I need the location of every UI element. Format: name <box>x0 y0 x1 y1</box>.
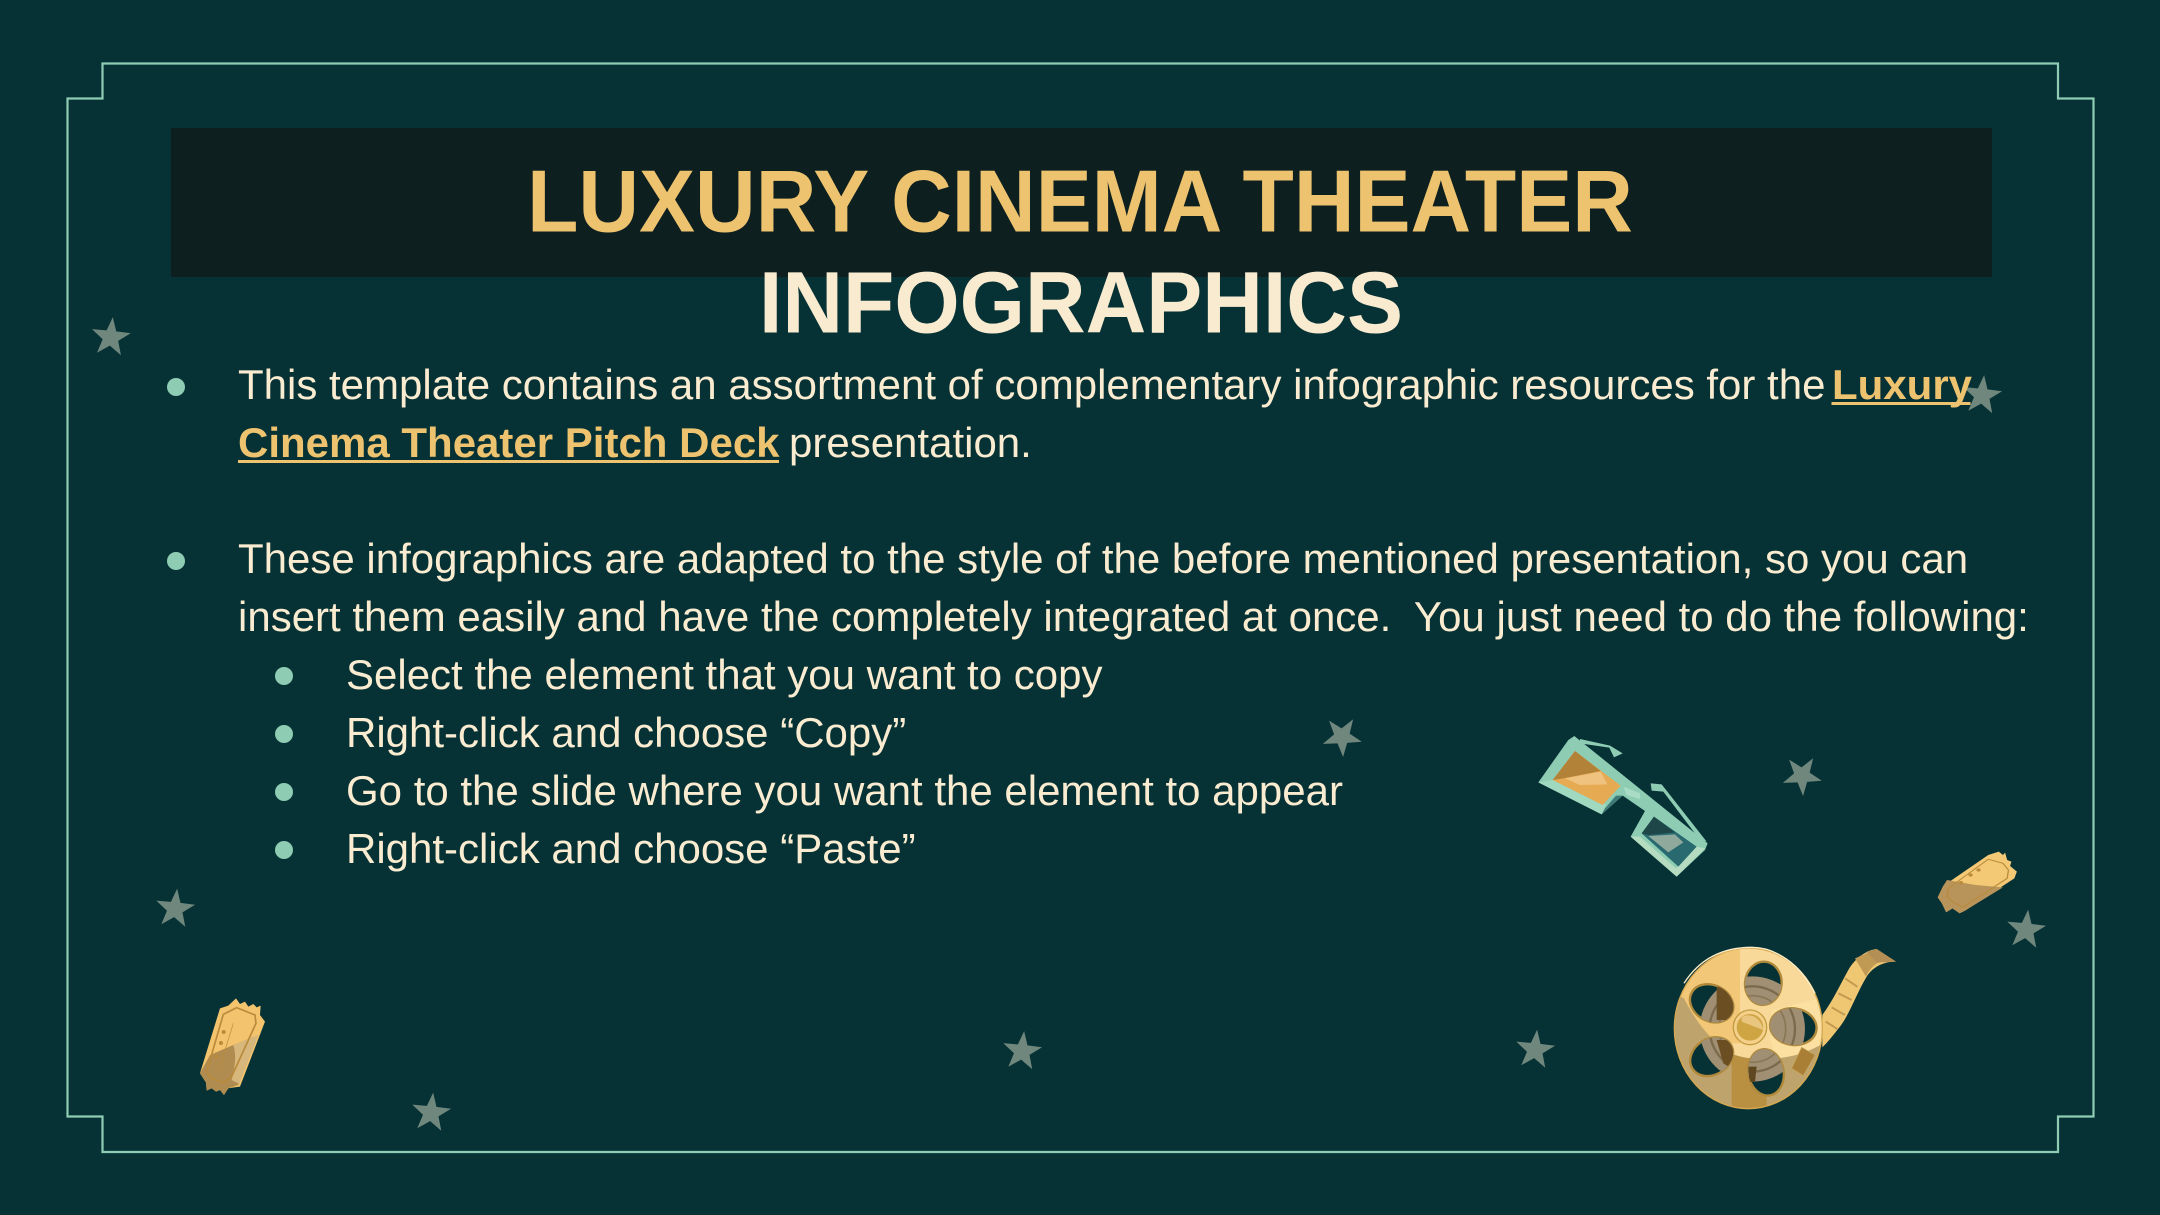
title band <box>171 128 1992 277</box>
body bullets: Cinema Theater Pitch Deck <box>238 419 780 466</box>
body bullets: Select the element that you want to copy <box>346 651 1102 698</box>
body bullets: Go to the slide where you want the element to appear <box>346 767 1343 814</box>
body bullets: Luxury <box>1832 361 1973 408</box>
icon: ticket left <box>200 998 265 1095</box>
body bullets: This template contains an assortment of complementary infographic resources for the <box>238 361 1825 408</box>
icon: ticket right <box>1938 852 2017 913</box>
film strip <box>1822 949 1896 1047</box>
body bullets: presentation. <box>789 419 1032 466</box>
film tag <box>1792 1047 1815 1076</box>
body bullets: Right-click and choose “Copy” <box>346 709 906 756</box>
title: LUXURY CINEMA THEATER <box>527 153 1633 251</box>
icon: 3D glasses <box>1538 736 1708 877</box>
stars <box>90 315 2048 1132</box>
inner roll <box>1700 976 1805 1082</box>
body bullets: These infographics are adapted to the style of the before mentioned presentation, so you can <box>238 535 1968 582</box>
hub <box>1733 1010 1767 1045</box>
title <box>527 153 1633 352</box>
holes <box>1683 960 1819 1098</box>
body bullets <box>167 361 2029 872</box>
body bullets: Right-click and choose “Paste” <box>346 825 916 872</box>
reel disc <box>1674 948 1823 1109</box>
body bullets: insert them easily and have the completely integrated at once. You just need to do the following: <box>238 593 2029 640</box>
title: INFOGRAPHICS <box>759 254 1403 352</box>
icon: film reel <box>1660 943 1896 1110</box>
